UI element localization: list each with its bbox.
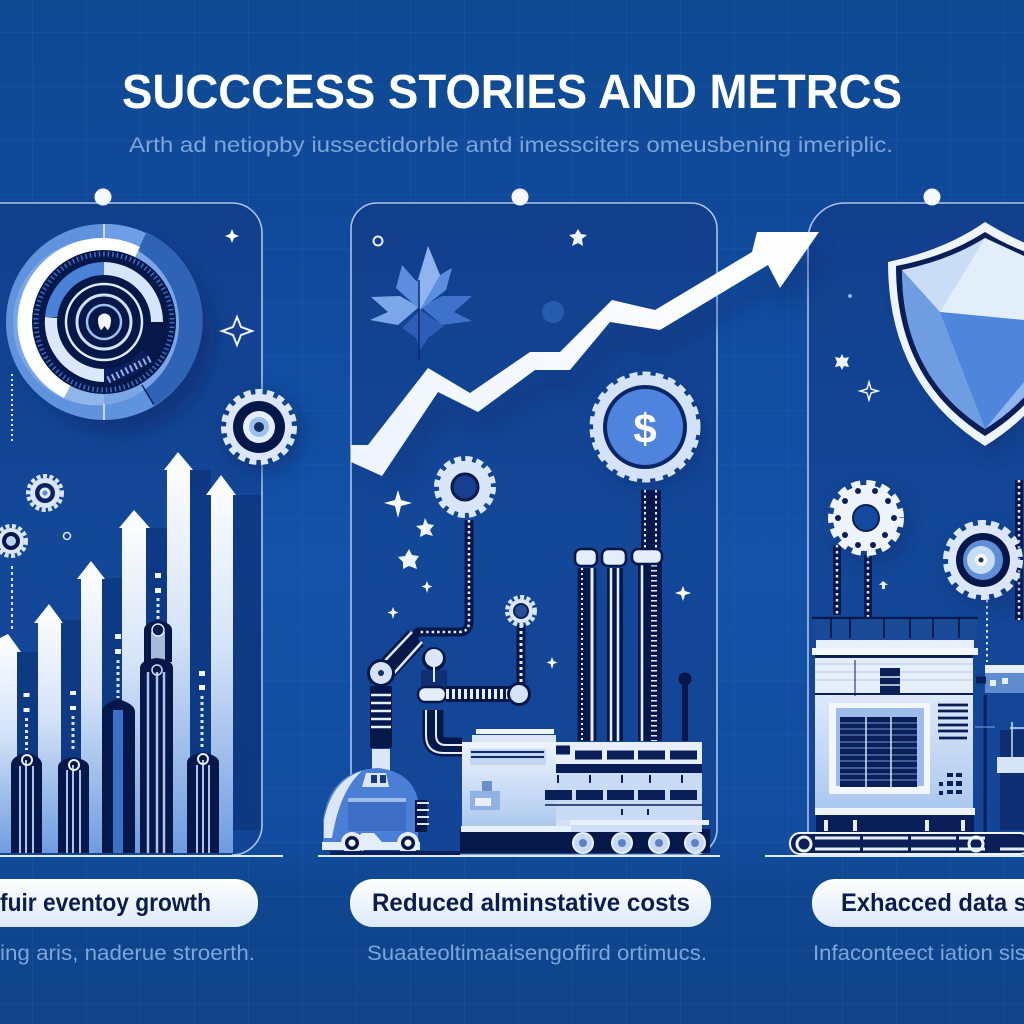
icon: leaf xyxy=(370,246,472,360)
icon: small ring xyxy=(374,236,382,246)
icon: flower sparkle xyxy=(398,549,419,569)
icon: sparkle outline xyxy=(860,382,878,400)
dark towers xyxy=(11,620,219,853)
gear: eye xyxy=(946,523,1024,606)
icon: small dot xyxy=(848,294,852,298)
icon: sparkle xyxy=(422,581,432,593)
icon: soft disc xyxy=(542,301,564,323)
gear: dotted pipe gear xyxy=(381,459,493,674)
factory machine xyxy=(460,729,710,853)
conveyor belt xyxy=(790,833,1024,854)
gear: small upper xyxy=(28,476,62,510)
vehicle xyxy=(322,768,460,855)
subtitle: Arth ad netiopby iussectidorble antd imessciters omeusbening imeriplic. xyxy=(129,134,893,157)
icon: small arrow mark xyxy=(879,581,888,589)
icon: sparkle xyxy=(546,657,558,669)
icon: sparkle xyxy=(225,229,239,243)
caption: reduced costs: Suaateoltimaaisengoffird ortimucs. xyxy=(367,942,707,965)
panel: investor growth xyxy=(0,188,304,855)
factory stacks xyxy=(575,490,692,741)
robot arm xyxy=(367,597,535,771)
title: SUCCCESS STORIES AND METRCS xyxy=(122,66,902,119)
label pill: revenue growth xyxy=(0,879,258,927)
side machine xyxy=(975,665,1024,832)
caption: revenue growth: ing aris, naderue stroerth. xyxy=(0,942,255,965)
icon: flower sparkle xyxy=(569,229,587,246)
dotted connectors xyxy=(26,573,202,752)
icon: sparkle xyxy=(384,490,412,518)
dotted line xyxy=(11,374,13,444)
server cabinet xyxy=(812,618,978,832)
label pill: reduced costs: Reduced alminstative costs xyxy=(372,889,690,917)
label pill: revenue growth: fuir eventoy growth xyxy=(0,889,211,917)
gear: white xyxy=(831,483,908,561)
icon: sparkle xyxy=(388,607,398,619)
icon: dollar coin: $ xyxy=(633,405,657,452)
icon: flower sparkle xyxy=(416,518,434,537)
dotted line xyxy=(11,566,13,632)
icon: sparkle outline xyxy=(222,317,252,345)
dial chart xyxy=(6,224,214,434)
label pill: reduced costs xyxy=(350,879,711,927)
icon: small ring xyxy=(64,532,70,540)
icon: dollar coin xyxy=(592,374,702,485)
icon: shield xyxy=(888,222,1024,455)
gear: large xyxy=(224,392,304,473)
icon: sparkle xyxy=(675,586,691,601)
caption: data security: Infaconteect iation sis xyxy=(813,942,1024,965)
arrow shadows xyxy=(17,470,261,853)
icon: sparkle xyxy=(835,354,849,370)
baseline rules xyxy=(0,855,1024,857)
dotted connectors xyxy=(837,480,1019,662)
big white trend arrow xyxy=(351,232,828,486)
panel: enhanced data security xyxy=(790,188,1024,855)
label pill: data security xyxy=(812,879,1024,927)
gear: small left xyxy=(0,526,26,556)
growth arrows xyxy=(0,452,236,853)
panel: reduced administrative costs xyxy=(322,188,717,855)
